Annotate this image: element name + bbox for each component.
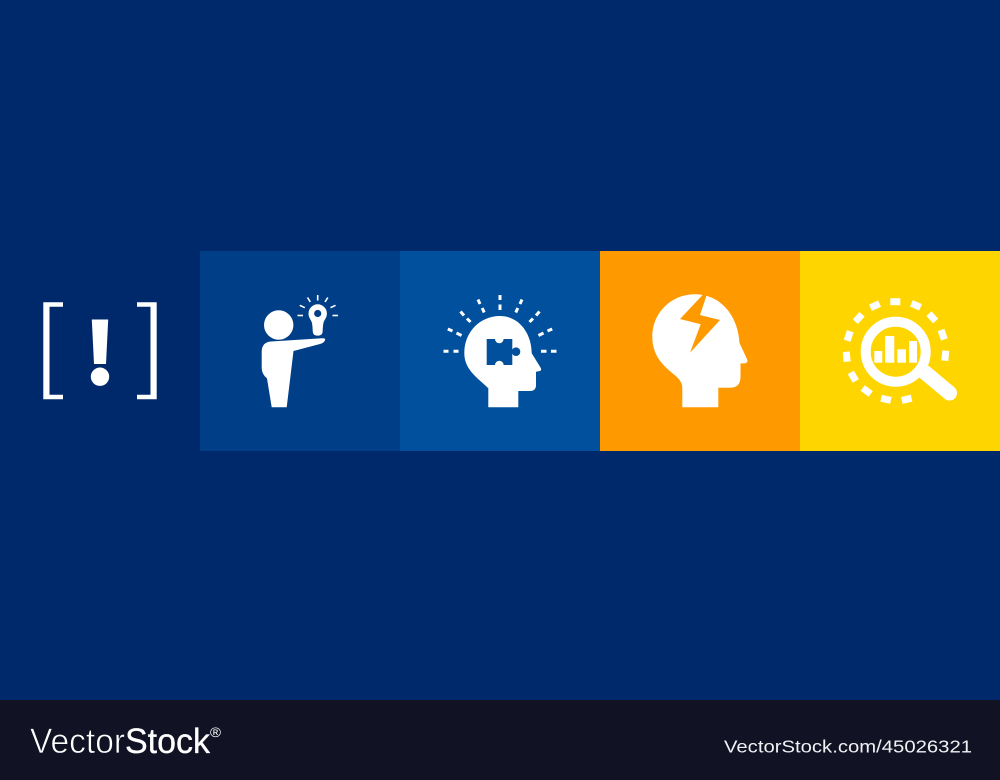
logo: VectorStock: Stock (125, 722, 210, 761)
logo: VectorStock (30, 722, 221, 761)
footer bar (0, 700, 1000, 780)
bar chart (874, 336, 917, 363)
image id text: VectorStock.com/45026321 (724, 736, 972, 756)
panel: head with puzzle piece (400, 251, 600, 451)
panel: magnifier with chart (800, 251, 1000, 451)
icon: lightning bolt (680, 294, 720, 353)
icon: puzzle piece (487, 335, 520, 369)
icon: head silhouette (464, 316, 541, 407)
icon: head silhouette (652, 294, 747, 407)
logo: VectorStock: ® (210, 725, 221, 740)
icon: dashed ring (843, 298, 949, 404)
logo: VectorStock: Vector (30, 722, 125, 761)
icon: magnifying glass (866, 322, 950, 393)
icon: radiating dashes (444, 295, 556, 351)
panel: person with idea (200, 251, 400, 451)
panel: head with lightning bolt (600, 251, 800, 451)
icon: person presenting a light bulb (262, 295, 338, 407)
icon: exclamation mark in brackets (43, 302, 157, 399)
